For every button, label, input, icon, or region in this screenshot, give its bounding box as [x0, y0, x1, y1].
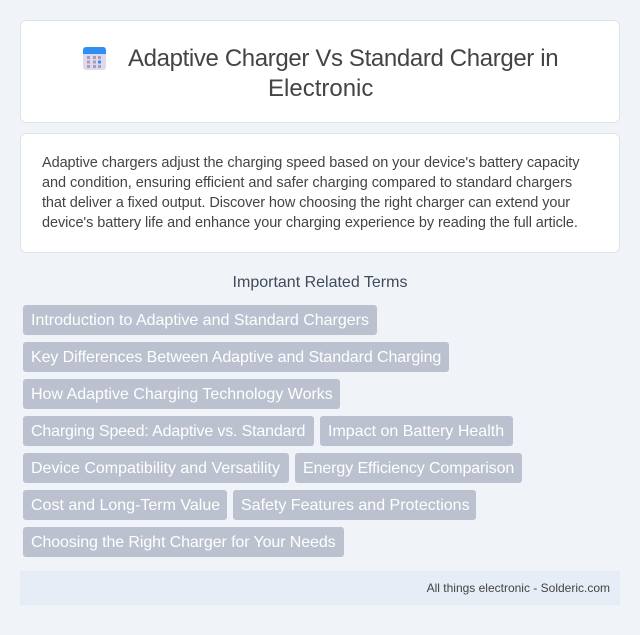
title: [128, 45, 558, 102]
tag: [23, 379, 340, 409]
tag: Safety Features and Protections: [241, 497, 470, 514]
intro text: [42, 155, 580, 231]
tag: [23, 416, 314, 446]
panel: introduction: [20, 133, 620, 253]
tag: Choosing the Right Charger for Your Needs: [31, 534, 336, 551]
title: Electronic: [268, 75, 373, 102]
tag: Energy Efficiency Comparison: [303, 460, 514, 477]
footer: [20, 571, 620, 605]
tag list: [23, 305, 522, 557]
heading: important related terms: Important Related Terms: [233, 274, 407, 291]
panel: title header: [20, 20, 620, 123]
tag: [233, 490, 476, 520]
tag: [23, 453, 289, 483]
tag: Cost and Long-Term Value: [31, 497, 220, 514]
title: Adaptive Charger Vs Standard Charger in: [128, 45, 558, 72]
tag: Device Compatibility and Versatility: [31, 460, 280, 477]
intro text: and condition, ensuring efficient and safer charging compared to standard chargers: [42, 175, 572, 191]
intro text: that deliver a fixed output. Discover how choosing the right charger can extend your: [42, 195, 570, 211]
tag: [23, 490, 227, 520]
intro text: device's battery life and enhance your charging experience by reading the full article.: [42, 215, 578, 231]
tag: How Adaptive Charging Technology Works: [31, 386, 333, 403]
tag: [320, 416, 513, 446]
tag: [23, 527, 344, 557]
tag: Key Differences Between Adaptive and Standard Charging: [31, 349, 441, 366]
tag: [23, 342, 449, 372]
tag: Introduction to Adaptive and Standard Chargers: [31, 312, 369, 329]
tag: Impact on Battery Health: [328, 423, 504, 440]
icon: calendar app: [83, 47, 106, 70]
intro text: Adaptive chargers adjust the charging speed based on your device's battery capacity: [42, 155, 579, 171]
tag: [23, 305, 377, 335]
tag: Charging Speed: Adaptive vs. Standard: [31, 423, 305, 440]
tag: [295, 453, 522, 483]
footer: All things electronic - Solderic.com: [427, 581, 610, 595]
